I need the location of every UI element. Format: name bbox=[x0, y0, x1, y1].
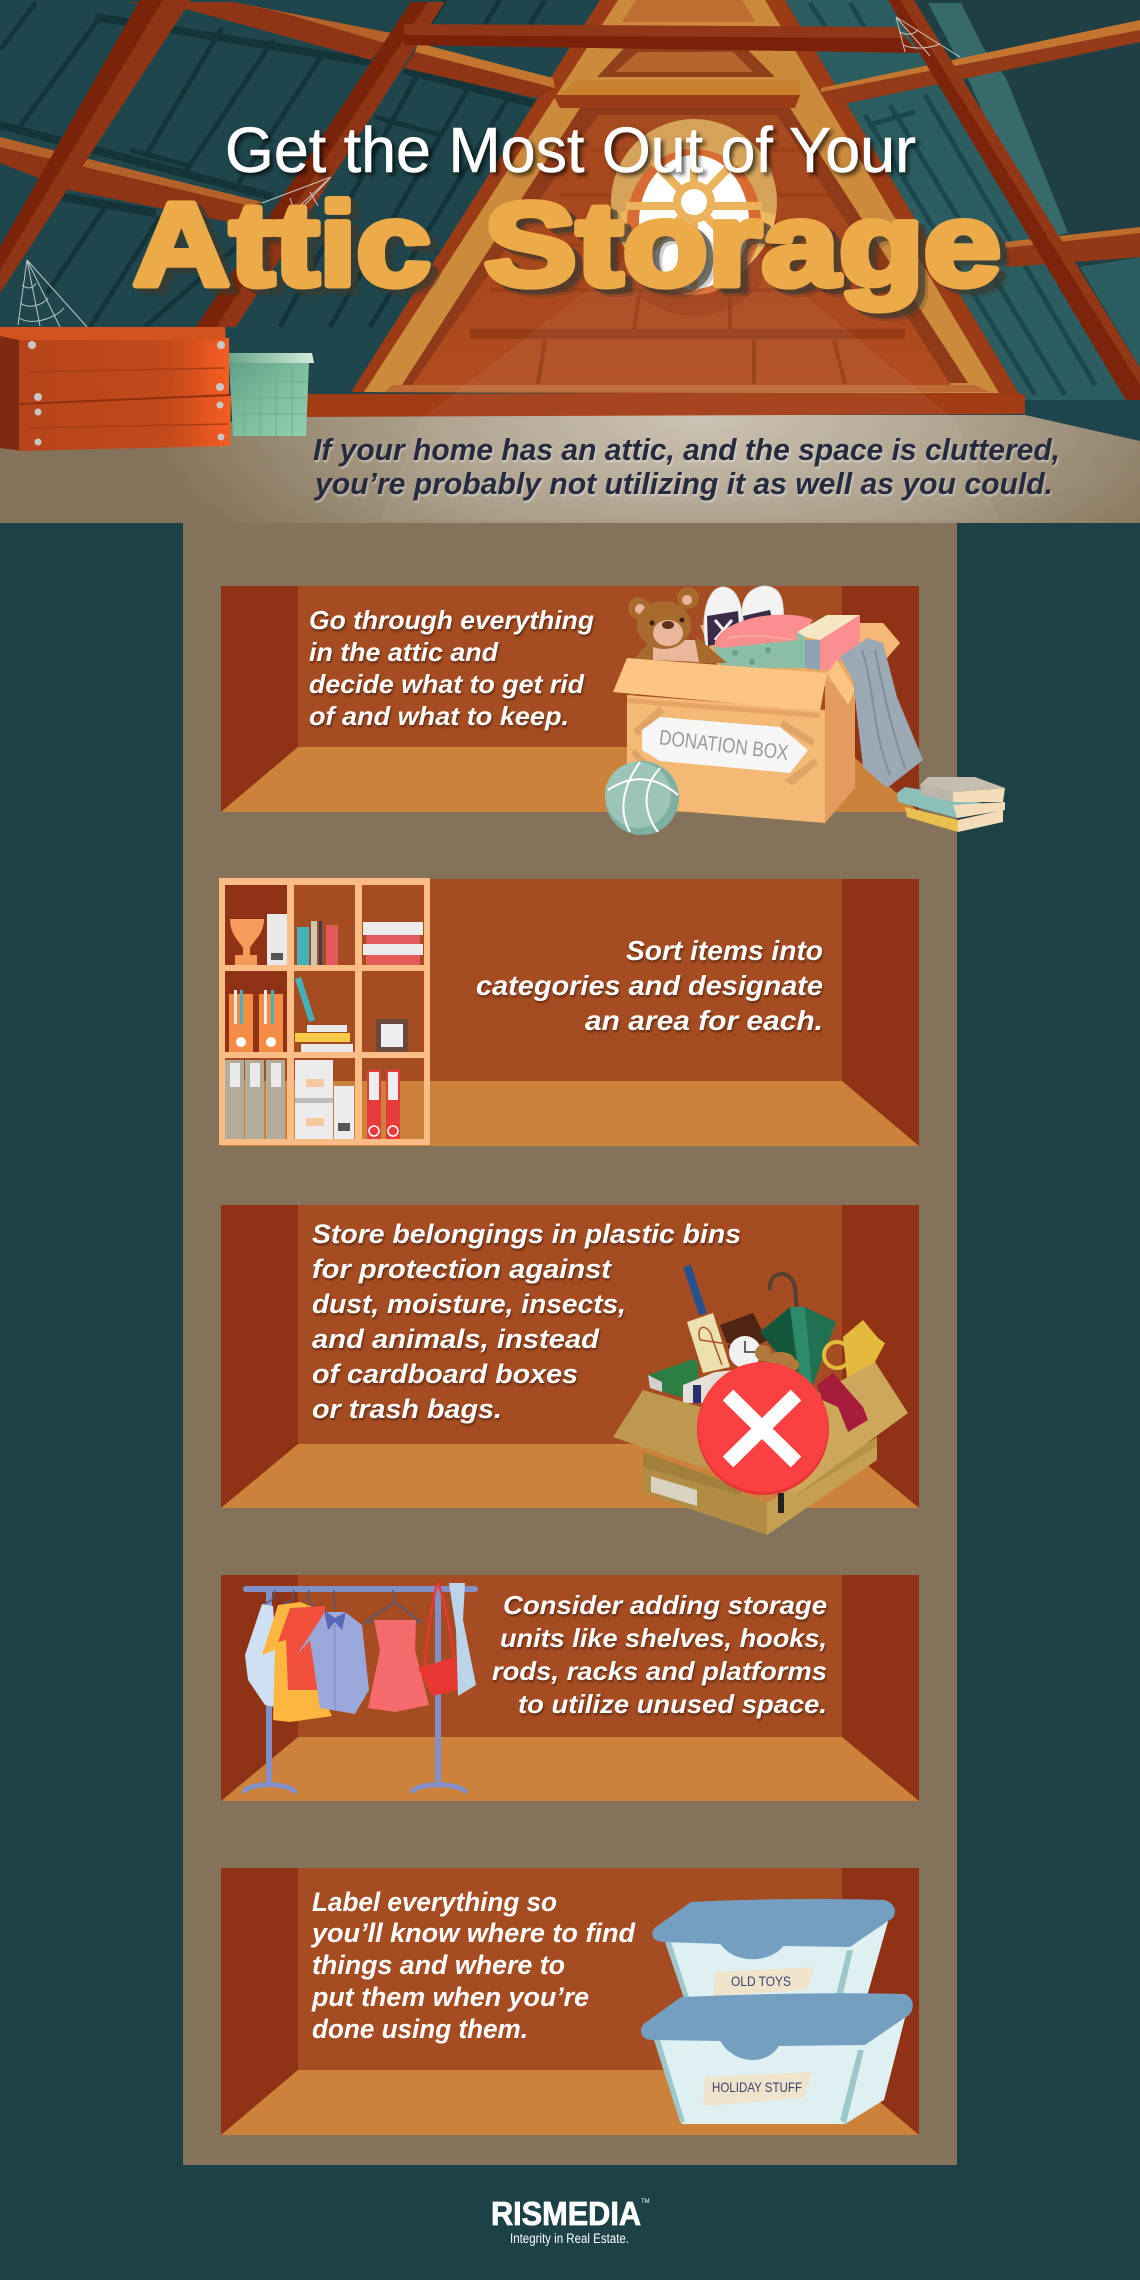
icon: small teddy bbox=[755, 1345, 799, 1371]
text 2: categories and designate bbox=[476, 970, 823, 1001]
icon: red bag bbox=[418, 1583, 458, 1696]
icon: top plastic bin bbox=[655, 1902, 892, 2016]
text 5: Label everything so bbox=[312, 1887, 557, 1917]
text 3 bbox=[312, 1219, 741, 1424]
text 4 bbox=[492, 1590, 827, 1719]
laundry basket bbox=[229, 353, 314, 436]
panel 1: sort through bbox=[221, 586, 1005, 835]
text 3: and animals, instead bbox=[312, 1324, 600, 1354]
logo: Integrity in Real Estate. bbox=[510, 2231, 629, 2246]
icon: ball bbox=[605, 761, 679, 835]
icon: teddy bear bbox=[626, 587, 727, 695]
shelf niche 3 bbox=[221, 1205, 919, 1508]
text 2: an area for each. bbox=[585, 1005, 823, 1036]
text 3: Store belongings in plastic bins bbox=[312, 1219, 741, 1249]
icon: folded clothes bbox=[713, 615, 813, 668]
icon: cardboard box with crossed-out clutter bbox=[613, 1266, 908, 1535]
attic scene bbox=[0, 0, 1140, 523]
icon: top plastic bin: OLD TOYS bbox=[731, 1973, 791, 1989]
icon: trophy bbox=[230, 919, 264, 965]
wooden crate bbox=[0, 327, 231, 451]
round attic window bbox=[610, 119, 778, 316]
icon: stack of books bbox=[897, 777, 1005, 832]
icon: bookcase bbox=[219, 878, 430, 1145]
shelf items middle row bbox=[229, 977, 408, 1052]
box label: DONATION BOX bbox=[658, 726, 790, 765]
beam of light bbox=[380, 245, 1000, 520]
text 5: done using them. bbox=[312, 2014, 528, 2044]
box label bbox=[631, 706, 818, 786]
text 5 bbox=[310, 1887, 636, 2044]
icon: white shirt bbox=[245, 1604, 280, 1708]
shelf niche 4 bbox=[221, 1575, 919, 1801]
cobwebs bbox=[18, 17, 960, 327]
icon: red cross sign bbox=[697, 1362, 829, 1495]
panel 3: plastic bins bbox=[221, 1205, 919, 1535]
shelf items top row bbox=[267, 914, 423, 965]
title line: Get the Most Out of Your bbox=[225, 114, 916, 186]
icon: cricket bat bbox=[687, 1266, 735, 1373]
icon: umbrella bbox=[760, 1274, 836, 1385]
icon: red top bbox=[278, 1606, 325, 1690]
icon: scarf on rack bbox=[449, 1583, 476, 1696]
text 4: units like shelves, hooks, bbox=[500, 1623, 827, 1653]
text 4: rods, racks and platforms bbox=[492, 1656, 827, 1686]
icon: books in box bbox=[797, 615, 860, 670]
attic floor bbox=[0, 415, 1140, 523]
text 1: decide what to get rid bbox=[309, 669, 585, 699]
icon: books bbox=[648, 1359, 735, 1403]
text 1 bbox=[309, 605, 594, 731]
panel 2: categories bbox=[219, 878, 919, 1146]
icon: clothes rack bbox=[244, 1583, 476, 1793]
logo: RISMEDIA bbox=[491, 2195, 641, 2232]
icon: scarf bbox=[817, 1373, 868, 1432]
panel 5: labels bbox=[221, 1868, 919, 2135]
icon: frame bbox=[720, 1313, 767, 1360]
icon: pink dress bbox=[368, 1620, 429, 1712]
roof beams bbox=[0, 0, 1140, 400]
text 2: Sort items into bbox=[626, 935, 823, 966]
icon: gold teapot bbox=[824, 1320, 885, 1378]
title: Attic Storage: Storage bbox=[484, 179, 1001, 311]
text 3: or trash bags. bbox=[312, 1394, 502, 1424]
text 4: to utilize unused space. bbox=[518, 1689, 827, 1719]
text 1: Go through everything bbox=[309, 605, 594, 635]
icon: clock bbox=[729, 1336, 761, 1368]
intro text: If your home has an attic, and the space is cluttered, bbox=[313, 432, 1060, 467]
text 3: of cardboard boxes bbox=[312, 1359, 578, 1389]
wall column bbox=[183, 523, 957, 2165]
icon: blue shirt bbox=[297, 1610, 369, 1714]
shelf niche 1 bbox=[221, 586, 919, 812]
text 4: Consider adding storage bbox=[503, 1590, 827, 1620]
gable wall with bricks bbox=[300, 0, 1025, 417]
text 1: in the attic and bbox=[309, 637, 499, 667]
title: Attic Storage: Attic bbox=[133, 179, 431, 311]
roof panels bbox=[0, 0, 1140, 450]
icon: blanket bbox=[840, 638, 923, 788]
text 3: for protection against bbox=[312, 1254, 612, 1284]
text 5: things and where to bbox=[312, 1950, 565, 1980]
title: Attic Storage bbox=[133, 179, 1001, 311]
text 1: of and what to keep. bbox=[309, 701, 569, 731]
shelf niche 5 bbox=[221, 1868, 919, 2135]
intro text: you’re probably not utilizing it as well as you could. bbox=[313, 466, 1053, 501]
shelf items bottom row bbox=[225, 1060, 400, 1139]
text 5: you’ll know where to find bbox=[310, 1918, 636, 1948]
icon: yellow dress bbox=[262, 1602, 332, 1722]
shelf niche 2 bbox=[221, 879, 919, 1146]
text 3: dust, moisture, insects, bbox=[312, 1289, 626, 1319]
icon: bottom plastic bin bbox=[644, 1996, 910, 2124]
text 5: put them when you’re bbox=[311, 1982, 589, 2012]
intro text bbox=[313, 432, 1060, 501]
icon: sneakers bbox=[704, 586, 783, 646]
icon: donation box bbox=[605, 586, 1005, 835]
logo: TM bbox=[641, 2199, 650, 2205]
panel 4: storage units bbox=[221, 1575, 919, 1801]
text 2 bbox=[476, 935, 823, 1036]
icon: bottom plastic bin: HOLIDAY STUFF bbox=[712, 2079, 802, 2095]
